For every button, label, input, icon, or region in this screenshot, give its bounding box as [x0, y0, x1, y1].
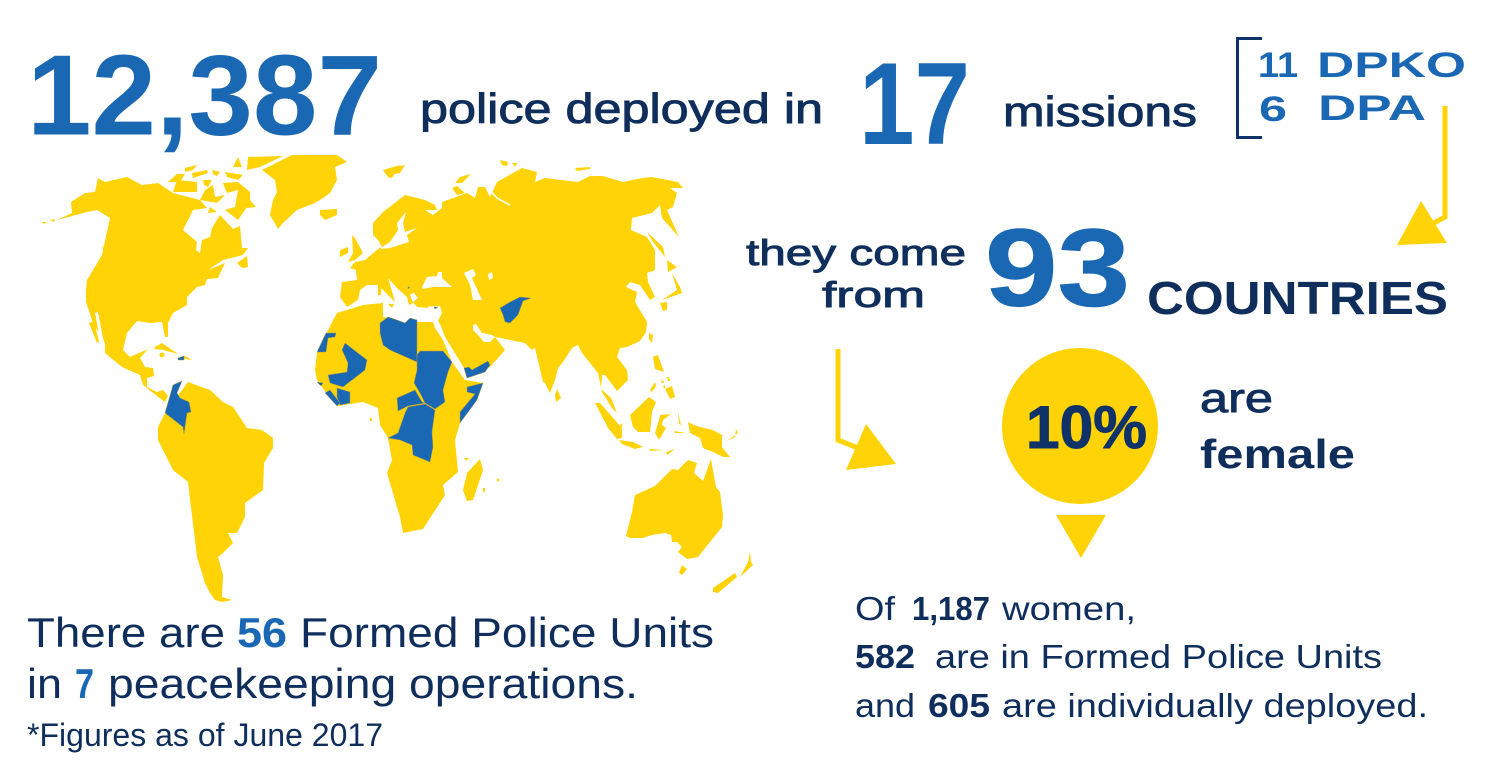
- women breakdown: 605: [928, 687, 990, 724]
- formed police units: 56: [237, 609, 287, 656]
- eurasia: [340, 160, 683, 413]
- women breakdown: 1,187: [912, 590, 990, 627]
- women breakdown: are individually deployed.: [1002, 687, 1428, 724]
- world map: [42, 155, 753, 602]
- mission breakdown: DPA: [1318, 89, 1426, 128]
- arrow: to countries: [1397, 106, 1447, 245]
- women breakdown: Of: [855, 590, 896, 627]
- bracket: [1238, 38, 1262, 138]
- headline: police deployed: [27, 32, 1197, 169]
- formed police units: There are: [27, 609, 225, 656]
- arrow: to women: [838, 349, 896, 470]
- headline: police deployed: missions: [1003, 88, 1197, 135]
- are female: female: [1200, 431, 1355, 477]
- mission breakdown: DPKO: [1317, 46, 1466, 85]
- they come from 93 countries: 93: [985, 206, 1130, 330]
- are female: are: [1200, 375, 1273, 421]
- they come from 93 countries: from: [822, 274, 925, 315]
- north america: [42, 156, 283, 402]
- greenland and iceland: [262, 155, 347, 229]
- formed police units: 7: [75, 660, 94, 707]
- headline: police deployed: police deployed in: [420, 85, 823, 132]
- they come from 93 countries: they come: [746, 232, 966, 273]
- women breakdown: 582: [855, 638, 915, 675]
- women breakdown: [855, 590, 1428, 724]
- mission breakdown: [1258, 46, 1466, 129]
- they come from 93 countries: [746, 206, 1448, 330]
- are female: [1200, 375, 1355, 477]
- inland water: [95, 187, 510, 345]
- mission breakdown: 6: [1259, 90, 1287, 129]
- women breakdown: and: [855, 687, 915, 724]
- highlighted mission countries: [165, 287, 531, 462]
- women breakdown: are in Formed Police Units: [935, 638, 1382, 675]
- circle: 10%: 10%: [1026, 394, 1147, 461]
- circle: 10%: [1002, 348, 1158, 504]
- formed police units: peacekeeping operations.: [108, 660, 638, 707]
- formed police units: [27, 609, 714, 707]
- south america: [158, 382, 273, 602]
- headline: police deployed: 12,387: [27, 32, 382, 160]
- indonesia and oceania: [595, 397, 753, 593]
- they come from 93 countries: COUNTRIES: [1147, 272, 1448, 324]
- women breakdown: women,: [1001, 590, 1136, 627]
- africa: [315, 303, 500, 533]
- footnote: *Figures as of June 2017: [27, 717, 383, 753]
- arrow: down: [1056, 515, 1106, 558]
- mission breakdown: 11: [1258, 46, 1298, 85]
- formed police units: in: [27, 660, 62, 707]
- headline: police deployed: 17: [859, 38, 970, 169]
- formed police units: Formed Police Units: [300, 609, 714, 656]
